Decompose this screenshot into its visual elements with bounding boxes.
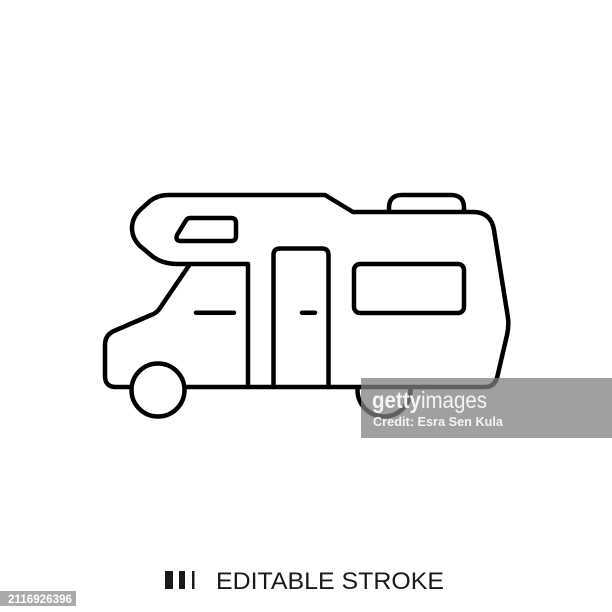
camper body outline <box>105 195 508 387</box>
stroke weight icon <box>165 571 194 589</box>
cab handle <box>196 310 234 315</box>
rear wheel <box>358 364 410 416</box>
watermark panel <box>361 378 612 438</box>
icon: camper van <box>105 195 508 416</box>
door <box>274 248 328 387</box>
side window <box>354 264 464 313</box>
image id: 2116926396 <box>8 594 72 606</box>
editable stroke caption: EDITABLE STROKE <box>216 568 444 595</box>
roof box <box>389 195 464 212</box>
watermark logo: gettyimages <box>372 387 487 413</box>
door handle <box>302 310 315 315</box>
image id badge <box>0 591 76 606</box>
watermark credit: Credit: Esra Sen Kula <box>373 414 504 429</box>
front wheel <box>132 364 184 416</box>
overhang window <box>176 218 236 241</box>
